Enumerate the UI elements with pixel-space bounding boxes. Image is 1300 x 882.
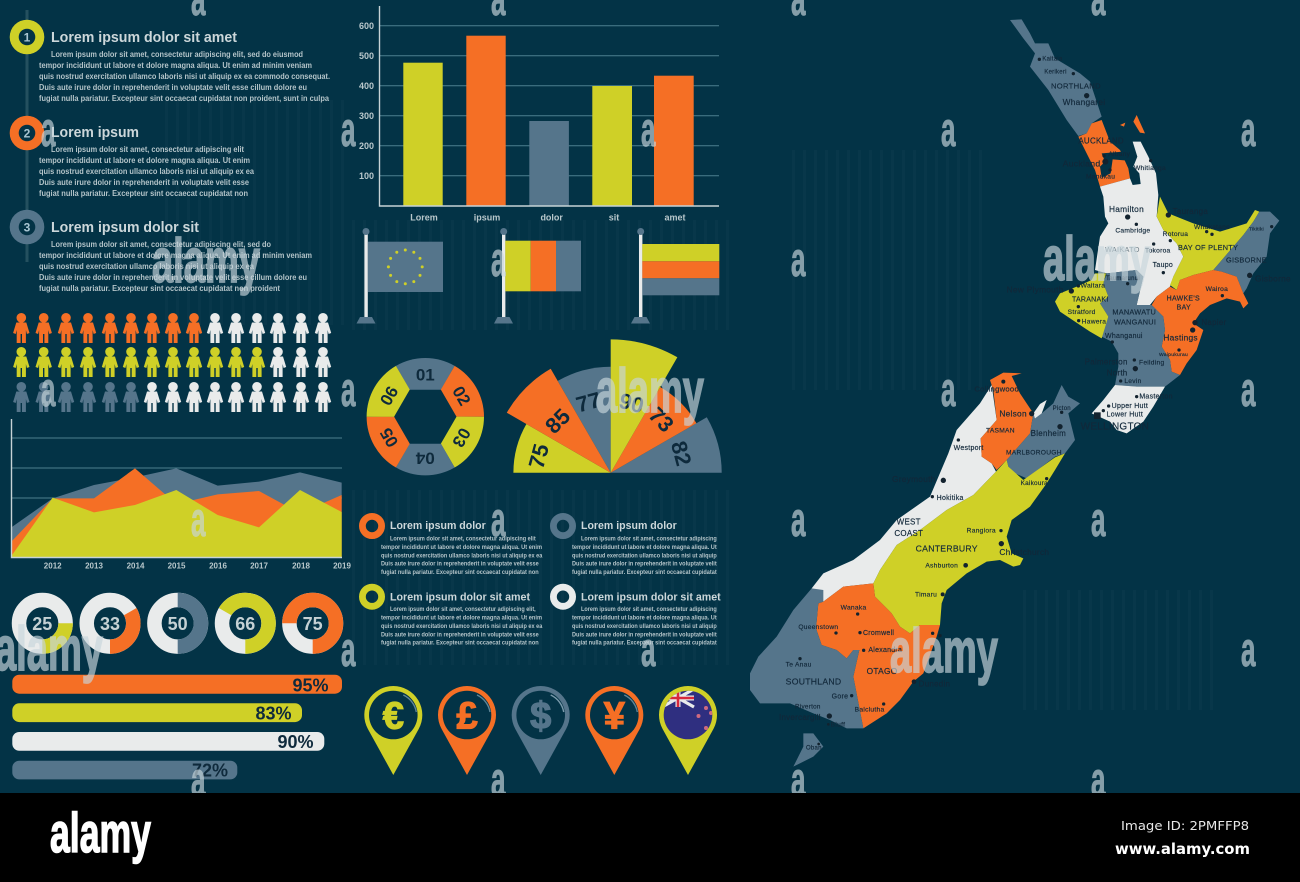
row 1: nine orange, six white <box>13 313 331 343</box>
stock watermarks: a <box>41 364 56 417</box>
stock watermarks: a <box>641 624 656 677</box>
North Island labels: Feilding <box>1139 360 1164 367</box>
donut 33: 33 <box>100 614 120 634</box>
North Island labels: Palmerston <box>1085 358 1128 367</box>
step 1 badge <box>10 20 44 54</box>
North Island labels: Hastings <box>1163 332 1198 342</box>
text block: orange: Lorem ipsum dolor <box>390 520 486 532</box>
area chart year labels: 2012 <box>44 562 62 570</box>
step 2 text: Duis aute irure dolor in reprehenderit in voluptate velit esse <box>39 178 249 187</box>
segment 05: 05 <box>376 425 402 450</box>
text block: white: Lorem ipsum dolor sit amet <box>581 592 721 604</box>
South Island labels: Westport <box>954 445 984 452</box>
North Island labels: Whitianga <box>1134 165 1166 172</box>
text block: blue: Lorem ipsum dolor <box>581 520 677 532</box>
North Island labels: WANGANUI <box>1114 317 1156 326</box>
North Island labels: New Plymouth <box>1007 285 1064 295</box>
bar 72%: 72% <box>192 760 228 780</box>
orange area series <box>11 468 342 557</box>
South Island labels: Ashburton <box>925 563 958 570</box>
region: Northland <box>1010 19 1102 136</box>
bar chart y axis values: 200 <box>359 141 374 151</box>
South Island labels: TASMAN <box>986 428 1015 435</box>
text block: blue: fugiat nulla pariatur. Excepteur sint occaecat cupidatat <box>572 569 717 576</box>
South Island labels: Hokitika <box>937 495 964 502</box>
South Island labels: Rangiora <box>967 528 996 535</box>
bar chart category labels: ipsum <box>474 212 500 222</box>
pin: euro: € <box>383 696 404 738</box>
South Island labels: Blenheim <box>1031 429 1066 438</box>
step 3 text: tempor incididunt ut labore et dolore magna aliqua. Ut enim ad minim veniam <box>39 251 312 260</box>
step 1 text: quis nostrud exercitation ullamco laboris nisi ut aliquip ex ea commodo consequat. <box>39 72 330 81</box>
South Island labels: Timaru <box>915 592 937 599</box>
North Island labels: Manukau <box>1086 173 1115 180</box>
stock watermarks: a <box>1241 624 1256 677</box>
text block: yellow: quis nostrud exercitation ullamco laboris nisi ut aliquip ex ea <box>381 623 543 630</box>
step 1 text <box>39 50 330 103</box>
North Island labels: BAY <box>1177 305 1191 312</box>
stock watermarks: a <box>941 104 956 157</box>
pin: New Zealand flag <box>659 686 717 775</box>
wedge 73 <box>611 387 696 473</box>
stock watermarks: a <box>341 364 356 417</box>
row 3: six blue, nine white <box>13 382 331 412</box>
area chart year labels: 2019 <box>333 562 351 570</box>
text block: orange <box>362 516 543 576</box>
value 75: 75 <box>524 441 554 471</box>
stock watermarks: a <box>1091 754 1106 807</box>
text block: white: fugiat nulla pariatur. Excepteur sint occaecat cupidatat <box>572 640 717 647</box>
wedge 85 <box>507 369 611 473</box>
South Island labels: Dunedin <box>919 680 950 689</box>
region: Marlborough <box>1007 385 1080 478</box>
area chart year labels: 2017 <box>250 562 268 570</box>
North Island labels: Gisborne <box>1255 274 1291 284</box>
North Island labels: Waipukurau <box>1159 352 1188 358</box>
text block: white: tempor incididunt ut labore et dolore magna aliqua. Ut <box>572 614 718 622</box>
stock watermarks: alamy <box>152 227 260 296</box>
pin: pound <box>438 686 496 775</box>
value 90: 90 <box>617 388 647 418</box>
region: Waikato <box>1095 142 1183 305</box>
bar chart <box>359 6 719 222</box>
stock watermarks: a <box>341 624 356 677</box>
region: Otago <box>816 583 940 728</box>
pin: yen <box>585 686 643 775</box>
South Island labels: Bluff <box>831 722 845 729</box>
step 1 text: tempor incididunt ut labore et dolore magna aliqua. Ut enim ad minim veniam <box>39 61 312 70</box>
donut 25 <box>19 600 66 647</box>
step 3 text: Lorem ipsum dolor sit amet, consectetur adipiscing elit, sed do <box>51 240 271 249</box>
row 2: twelve yellow, three white <box>13 347 331 377</box>
stock watermarks: alamy <box>596 357 704 426</box>
text block: white: quis nostrud exercitation ullamco laboris nisi ut aliquip <box>572 623 717 630</box>
North Island labels: Cambridge <box>1115 228 1150 235</box>
donut 25: 25 <box>32 614 52 634</box>
step 2 text: tempor incididunt ut labore et dolore magna aliqua. Ut enim <box>39 156 250 165</box>
text block: yellow: tempor incididunt ut labore et dolore magna aliqua. Ut enim <box>381 614 542 622</box>
step 2 heading: Lorem ipsum <box>51 124 139 141</box>
North Island labels: Upper Hutt <box>1112 403 1148 410</box>
stock watermarks: a <box>1241 104 1256 157</box>
step 3 badge <box>10 210 44 244</box>
South Island labels: Invercargill <box>779 713 821 722</box>
wedge 82 <box>611 417 722 473</box>
region: Stewart Island <box>793 733 823 767</box>
region: Manawatu-Wanganui <box>1100 270 1180 387</box>
stock watermarks: a <box>1091 494 1106 547</box>
text block: white: Duis aute irure dolor in reprehenderit in voluptate velit <box>572 631 717 638</box>
South Island city markers <box>798 380 1063 745</box>
step 3 text <box>39 240 312 293</box>
North Island labels <box>1007 57 1291 432</box>
value 77: 77 <box>573 387 603 417</box>
pin: euro <box>364 686 422 775</box>
step 1 text: Duis aute irure dolor in reprehenderit in voluptate velit esse cillum dolore eu <box>39 83 307 92</box>
website: www.alamy.com <box>1115 840 1250 858</box>
percentage donut row <box>19 600 336 647</box>
pin: dollar <box>512 686 570 775</box>
stock watermarks: a <box>41 104 56 157</box>
segment 01: 01 <box>416 366 435 385</box>
flag: vertical tricolour <box>494 228 581 324</box>
North Island labels: Auckland <box>1063 159 1100 169</box>
North Island labels: Taupo <box>1153 262 1173 269</box>
step 2 text: Lorem ipsum dolor sit amet, consectetur adipiscing elit <box>51 145 244 154</box>
bar chart y axis values: 500 <box>359 51 374 61</box>
donut 75: 75 <box>303 614 323 634</box>
donut 66 <box>222 600 269 647</box>
value 73: 73 <box>644 402 679 437</box>
stock watermarks: a <box>791 494 806 547</box>
donut 75 <box>289 600 336 647</box>
North Island labels: WELLINGTON <box>1081 421 1149 432</box>
North Island labels: Kerikeri <box>1044 70 1067 76</box>
yellow area series <box>11 490 342 557</box>
South Island labels: Balclutha <box>855 706 884 713</box>
segment 02: 02 <box>448 383 474 409</box>
value 85: 85 <box>540 404 575 439</box>
North Island labels: MANAWATU <box>1112 308 1156 317</box>
South Island labels: Greymouth <box>892 474 936 484</box>
bar chart category labels: Lorem <box>410 212 438 222</box>
bar 95%: 95% <box>292 676 328 696</box>
text block: orange: tempor incididunt ut labore et dolore magna aliqua. Ut enim <box>381 544 542 551</box>
North Island labels: Waitara <box>1081 283 1105 290</box>
region: Southland <box>750 588 863 728</box>
text block: blue: quis nostrud exercitation ullamco laboris nisi ut aliquip <box>572 552 717 559</box>
South Island labels: Picton <box>1053 406 1071 412</box>
step 2 badge: 2 <box>24 126 31 140</box>
text block: orange: Duis aute irure dolor in reprehenderit in voluptate velit esse <box>381 561 539 568</box>
North Island labels: Whakatane <box>1194 224 1230 231</box>
value 82: 82 <box>666 438 696 468</box>
area chart year labels: 2016 <box>209 562 227 570</box>
text block: orange: quis nostrud exercitation ullamco laboris nisi ut aliquip ex ea <box>381 552 543 559</box>
North Island labels: Whanganui <box>1105 333 1143 340</box>
region: Hawke's Bay <box>1152 270 1248 375</box>
South Island labels: Kaikoura <box>1021 480 1048 487</box>
donut 33 <box>87 600 133 647</box>
area chart year labels: 2015 <box>168 562 186 570</box>
North Island labels: Kaitaia <box>1042 57 1063 63</box>
step 3 text: Duis aute irure dolor in reprehenderit in voluptate velit esse cillum dolore eu <box>39 273 307 282</box>
text block: yellow <box>362 587 543 647</box>
South Island labels: Cromwell <box>863 630 894 637</box>
stock watermarks: a <box>941 364 956 417</box>
North Island labels: Whangarei <box>1063 97 1105 107</box>
wedge 75 <box>513 424 611 473</box>
North Island labels: Lower Hutt <box>1107 412 1143 419</box>
stock watermarks: a <box>191 754 206 807</box>
text block: white <box>553 587 721 647</box>
step 3 text: quis nostrud exercitation ullamco laboris nisi ut aliquip ex ea <box>39 262 255 271</box>
region: Tasman <box>981 373 1033 470</box>
step 1 text: Lorem ipsum dolor sit amet, consectetur adipiscing elit, sed do eiusmod <box>51 50 303 59</box>
South Island labels: Alexandra <box>868 647 902 654</box>
area chart year labels <box>44 562 351 570</box>
South Island labels: MARLBOROUGH <box>1006 450 1062 457</box>
South Island labels: SOUTHLAND <box>786 677 841 687</box>
region: Wellington <box>1092 385 1165 433</box>
bars <box>403 36 694 206</box>
step 2 text: fugiat nulla pariatur. Excepteur sint occaecat cupidatat non <box>39 189 248 198</box>
wedge 77 <box>558 367 611 473</box>
North Island labels: Hamilton <box>1109 204 1144 214</box>
region: Auckland <box>1078 115 1145 187</box>
North Island labels: GISBORNE <box>1226 256 1267 265</box>
bar chart y axis values: 400 <box>359 81 374 91</box>
stock watermarks: a <box>1241 364 1256 417</box>
text block: yellow: Lorem ipsum dolor sit amet, consectetur adipiscing elit, <box>390 606 536 613</box>
bar chart y axis values: 100 <box>359 171 374 181</box>
radial fan chart <box>507 339 722 473</box>
bar chart category labels: sit <box>609 212 619 222</box>
South Island labels: OTAGO <box>867 666 898 676</box>
bar chart category labels: amet <box>664 212 686 222</box>
North Island labels: Hawera <box>1082 319 1106 326</box>
South Island labels: WEST <box>897 518 921 527</box>
text block: white: Lorem ipsum dolor sit amet, consectetur adipiscing <box>581 606 717 613</box>
North Island labels: Tauranga <box>1173 207 1208 216</box>
step 3 badge: 3 <box>24 220 31 234</box>
step 2 text <box>39 145 255 198</box>
stock watermarks: a <box>191 494 206 547</box>
bar chart y axis values <box>359 21 374 181</box>
pin: pound: £ <box>456 696 478 738</box>
pin: yen: ¥ <box>604 696 625 738</box>
stock watermarks: a <box>641 104 656 157</box>
numbered list panel <box>10 10 330 293</box>
South Island labels: COAST <box>894 529 923 538</box>
region: West Coast <box>812 385 997 602</box>
stock watermarks: a <box>341 104 356 157</box>
South Island labels: Oban <box>806 745 822 751</box>
North Island city markers <box>1038 58 1273 419</box>
step 2 badge <box>10 116 44 150</box>
area chart year labels: 2018 <box>292 562 310 570</box>
text block: blue: Duis aute irure dolor in reprehenderit in voluptate velit <box>572 561 717 568</box>
Auckland harbours <box>1100 152 1127 178</box>
donut 66: 66 <box>235 614 255 634</box>
area chart year labels: 2013 <box>85 562 103 570</box>
region: Taranaki <box>1055 273 1108 338</box>
people pictogram chart <box>13 313 331 412</box>
South Island labels: Riverton <box>795 703 821 710</box>
stock watermarks: alamy <box>1043 225 1151 294</box>
segment 06: 06 <box>376 383 402 409</box>
area chart year labels: 2014 <box>127 562 145 570</box>
text block: orange: Lorem ipsum dolor sit amet, consectetur adipiscing elit <box>390 536 536 543</box>
text block: blue <box>553 516 718 576</box>
North Island labels: WAIKATO <box>1105 245 1140 254</box>
map: South Island <box>750 373 1080 767</box>
stock watermarks: a <box>791 754 806 807</box>
South Island labels: Gore <box>832 693 848 700</box>
North Island labels: TARANAKI <box>1072 297 1109 304</box>
North Island labels: Albany <box>1108 151 1131 158</box>
South Island labels: Queenstown <box>798 624 838 631</box>
horizontal progress bars <box>12 675 342 780</box>
North Island labels: Stratford <box>1068 309 1096 316</box>
region: Canterbury <box>873 453 1065 633</box>
step 3 heading: Lorem ipsum dolor sit <box>51 219 199 236</box>
North Island labels: NORTHLAND <box>1051 81 1101 90</box>
text block: blue: Lorem ipsum dolor sit amet, consectetur adipiscing <box>581 536 717 543</box>
footer logo: alamy <box>50 801 151 864</box>
map: North Island <box>1007 19 1291 433</box>
stock watermarks: a <box>491 754 506 807</box>
text block: blue: tempor incididunt ut labore et dolore magna aliqua. Ut <box>572 544 718 551</box>
bar 95% <box>12 675 342 696</box>
South Island labels: Christchurch <box>999 547 1049 557</box>
stock watermarks: a <box>491 494 506 547</box>
stock watermarks: alamy <box>890 617 998 686</box>
donut 50: 50 <box>168 614 188 634</box>
stock watermarks: a <box>791 234 806 287</box>
text block: yellow: Lorem ipsum dolor sit amet <box>390 592 530 604</box>
North Island labels: North <box>1107 369 1128 378</box>
South Island labels: Collingwood <box>974 385 1019 394</box>
footer bar <box>0 793 1300 882</box>
donut 50 <box>154 600 201 647</box>
step 3 text: fugiat nulla pariatur. Excepteur sint occaecat cupidatat non proident <box>39 284 280 293</box>
North Island labels: Tikitiki <box>1249 227 1264 232</box>
bar chart y axis values: 300 <box>359 111 374 121</box>
region: Bay of Plenty <box>1157 197 1259 290</box>
bar chart y axis values: 600 <box>359 21 374 31</box>
bar 83%: 83% <box>255 704 292 724</box>
step 2 text: quis nostrud exercitation ullamco laboris nisi ut aliquip ex ea <box>39 167 255 176</box>
North Island labels: Levin <box>1124 378 1142 385</box>
pin: dollar: $ <box>530 696 551 738</box>
step 1 badge: 1 <box>24 30 31 44</box>
South Island labels: CANTERBURY <box>916 544 978 554</box>
bar 90%: 90% <box>277 732 314 752</box>
text block: yellow: fugiat nulla pariatur. Excepteur sint occaecat cupidatat non <box>381 640 539 647</box>
bar 72% <box>12 760 237 780</box>
South Island labels: Wanaka <box>841 605 866 612</box>
North Island labels: Rotorua <box>1163 231 1188 238</box>
map pins row <box>364 686 717 775</box>
region: Gisborne <box>1213 212 1279 293</box>
stock watermarks: a <box>491 234 506 287</box>
wedge 90 <box>611 339 677 473</box>
image id: Image ID: 2PMFFP8 <box>1121 818 1249 833</box>
bar chart category labels <box>410 212 686 222</box>
flag: horizontal tricolour <box>631 228 719 324</box>
bar 83% <box>12 703 302 724</box>
North Island labels: BAY OF PLENTY <box>1178 243 1238 252</box>
hexagon ring chart <box>360 358 491 475</box>
South Island labels <box>779 385 1071 751</box>
North Island labels: Napier <box>1201 318 1227 327</box>
North Island labels: Tokoroa <box>1145 247 1171 254</box>
North Island labels: Wairoa <box>1206 286 1228 293</box>
bar chart category labels: dolor <box>540 212 563 222</box>
North Island labels: AUCKLAND <box>1078 136 1124 145</box>
bar 90% <box>12 732 324 752</box>
step 1 text: fugiat nulla pariatur. Excepteur sint occaecat cupidatat non proident, sunt in culpa <box>39 94 330 103</box>
text block: yellow: Duis aute irure dolor in reprehenderit in voluptate velit esse <box>381 631 539 638</box>
segment 04: 04 <box>415 449 435 468</box>
South Island labels: Te Anau <box>786 662 812 669</box>
step 1 heading: Lorem ipsum dolor sit amet <box>51 29 237 46</box>
North Island labels: Taumarunui <box>1106 276 1140 282</box>
blue area series <box>11 468 342 557</box>
stock watermarks: alamy <box>0 615 103 684</box>
text block: orange: fugiat nulla pariatur. Excepteur sint occaecat cupidatat non <box>381 569 539 576</box>
flag: EU style <box>356 228 443 324</box>
North Island labels: HAWKE'S <box>1167 295 1200 302</box>
area chart <box>11 419 351 570</box>
North Island labels: Masterton <box>1139 394 1173 401</box>
segment 03: 03 <box>448 425 474 450</box>
South Island labels: Nelson <box>999 408 1027 418</box>
